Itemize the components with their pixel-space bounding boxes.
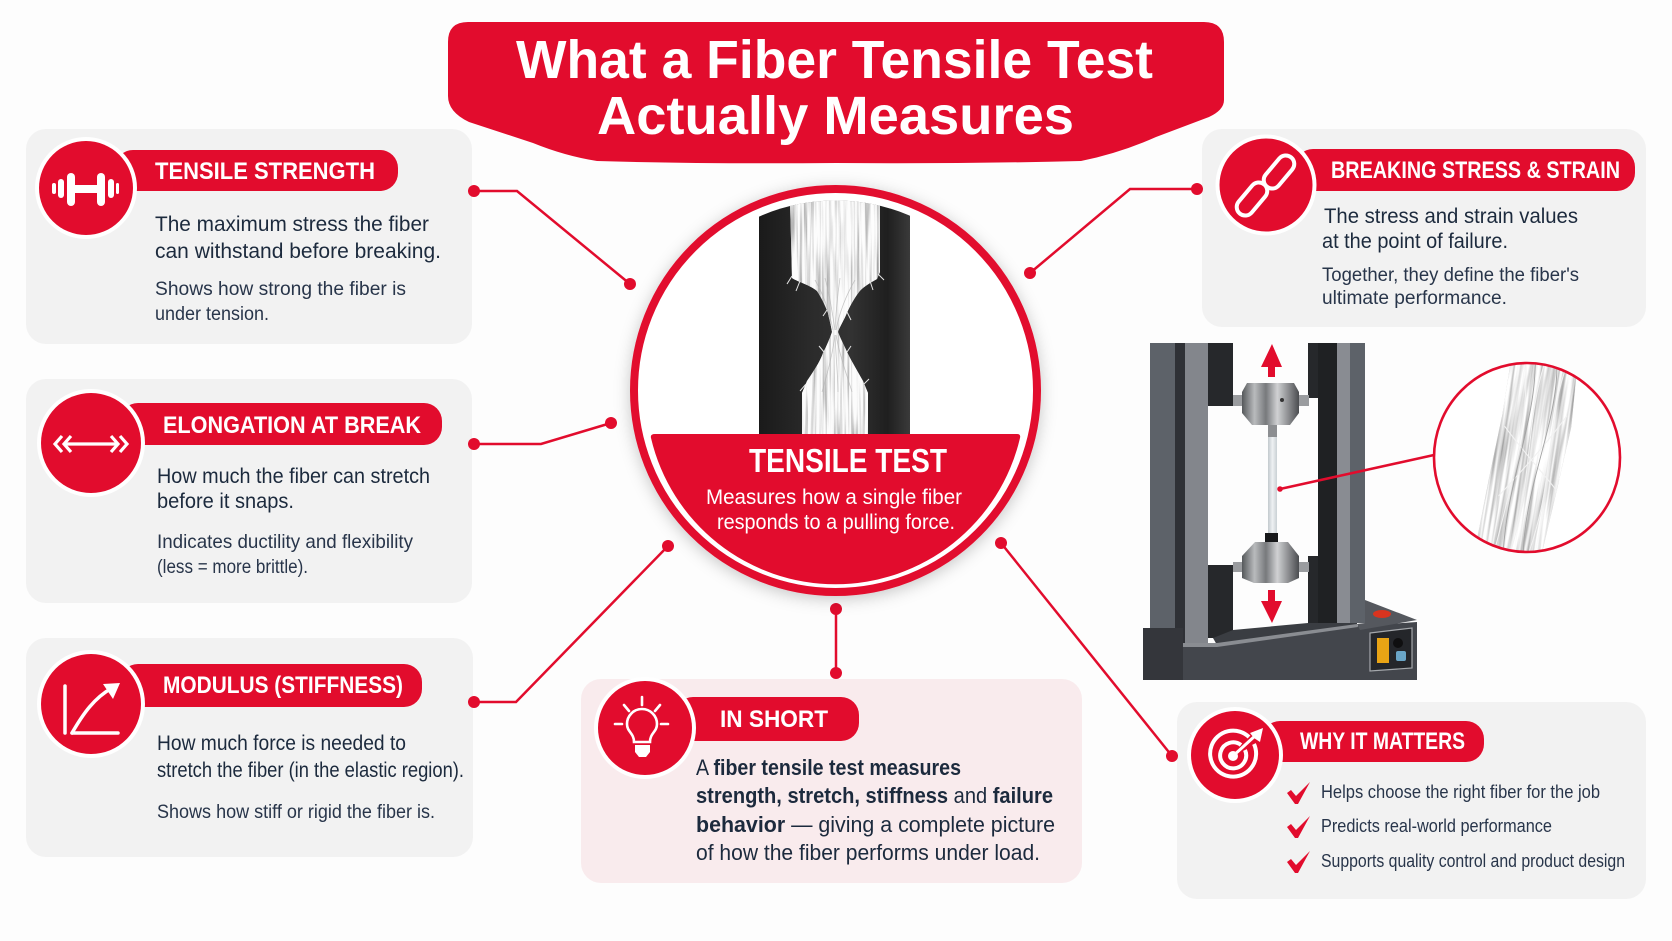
icon: stress-strain graph [37, 650, 145, 758]
body text: can withstand before breaking. [155, 240, 441, 263]
body text: The maximum stress the fiber [155, 213, 429, 236]
body text: ultimate performance. [1322, 287, 1507, 309]
body text: Together, they define the fiber's [1322, 264, 1579, 286]
pill heading [1295, 149, 1635, 191]
pill heading: WHY IT MATTERS [1300, 728, 1465, 755]
magnifier callout [1277, 350, 1620, 565]
body text: Shows how strong the fiber is [155, 278, 406, 300]
icon: dumbbell [35, 137, 137, 239]
pill heading: TENSILE STRENGTH [155, 158, 375, 185]
connector: modulus [468, 540, 674, 708]
lower grip [1233, 533, 1309, 583]
caption text: TENSILE TEST [749, 442, 947, 479]
body text [1322, 205, 1579, 309]
pill heading [115, 150, 398, 191]
specimen fiber [1268, 437, 1277, 533]
control panel [1370, 610, 1412, 671]
panel: why it matters [1177, 702, 1646, 899]
body text: Shows how stiff or rigid the fiber is. [157, 801, 435, 823]
pill heading [1262, 721, 1484, 762]
connector: in short [830, 603, 842, 679]
pill heading [120, 664, 422, 707]
pill heading: MODULUS (STIFFNESS) [163, 672, 403, 699]
pill heading: IN SHORT [720, 706, 828, 733]
icon: chain link [1216, 134, 1316, 236]
caption text: Measures how a single fiber [706, 486, 962, 509]
body text: How much the fiber can stretch [157, 465, 430, 488]
testing machine [1143, 343, 1417, 680]
body text: How much force is needed to [157, 732, 406, 755]
summary text: of how the fiber performs under load. [696, 840, 1040, 865]
summary text: behavior — giving a complete picture [696, 812, 1055, 837]
body text: at the point of failure. [1322, 230, 1508, 253]
machine frame [1143, 343, 1417, 680]
check list: Predicts real-world performance [1321, 815, 1552, 836]
connector: tensile strength [468, 185, 636, 290]
red caption segment [651, 434, 1020, 584]
connector: breaking stress [1024, 183, 1203, 279]
central circle: tensile test [634, 189, 1037, 592]
connector: elongation [468, 417, 617, 450]
body text [155, 213, 441, 325]
check list: Supports quality control and product design [1321, 850, 1625, 871]
caption text: responds to a pulling force. [717, 511, 955, 534]
pill heading: BREAKING STRESS & STRAIN [1331, 157, 1620, 184]
connector: why it matters [995, 537, 1178, 762]
check list [1287, 781, 1625, 873]
summary text: A fiber tensile test measures [696, 755, 961, 780]
caption text [706, 442, 962, 534]
body text: under tension. [155, 303, 269, 325]
body text: (less = more brittle). [157, 556, 308, 578]
check list: Helps choose the right fiber for the job [1321, 781, 1600, 802]
icon: light bulb [594, 677, 696, 779]
body text: The stress and strain values [1324, 205, 1578, 228]
title banner: What a Fiber Tensile Test [516, 30, 1153, 90]
body text: Indicates ductility and flexibility [157, 531, 413, 553]
panel: breaking stress and strain [1202, 129, 1646, 327]
summary text: strength, stretch, stiffness and failure [696, 783, 1053, 808]
pill heading [675, 697, 859, 741]
title banner: Actually Measures [597, 86, 1074, 146]
summary text [696, 755, 1055, 865]
icon: stretch arrows [37, 389, 145, 497]
upper grip [1233, 383, 1309, 437]
magnified fiber strands [1478, 364, 1576, 551]
panel: tensile strength [26, 129, 472, 344]
arrow: pull down [1261, 590, 1282, 623]
panel: elongation at break [26, 379, 472, 603]
pill heading [120, 403, 442, 445]
title banner [448, 22, 1224, 163]
icon: target [1187, 707, 1283, 803]
panel: modulus [26, 638, 473, 857]
pill heading: ELONGATION AT BREAK [163, 412, 422, 439]
photo: fiber necking [759, 195, 910, 434]
body text [157, 732, 464, 823]
body text: before it snaps. [157, 490, 294, 513]
arrow: pull up [1261, 344, 1282, 377]
panel: in short [581, 677, 1082, 883]
body text: stretch the fiber (in the elastic region). [157, 759, 464, 782]
body text [157, 465, 430, 578]
